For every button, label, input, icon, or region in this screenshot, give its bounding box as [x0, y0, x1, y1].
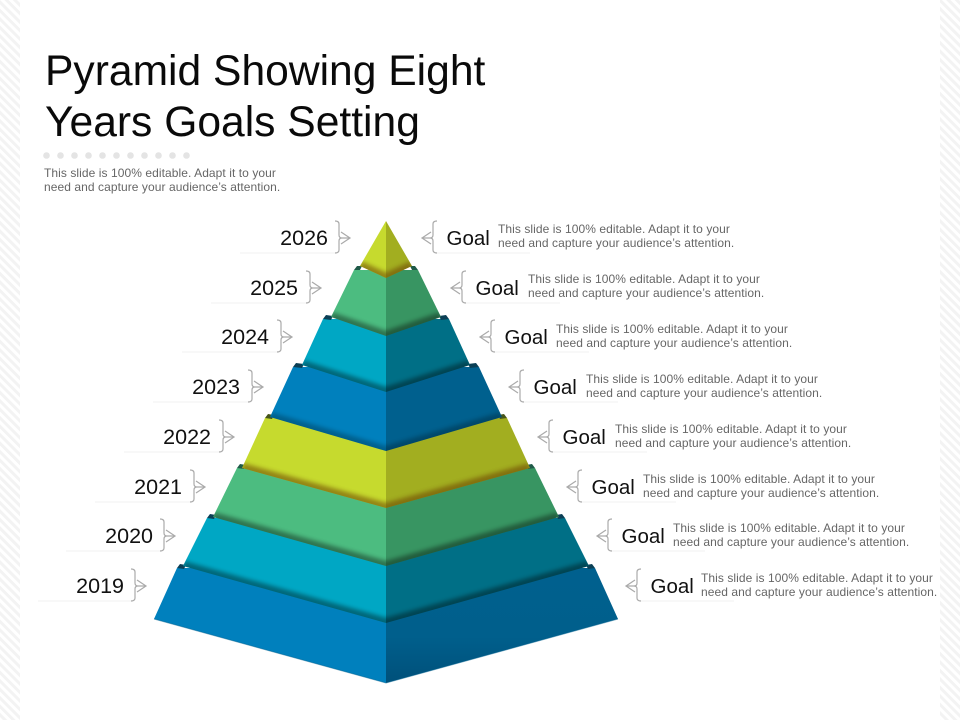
- goal 2021: This slide is 100% editable. Adapt it to your: [643, 472, 875, 486]
- goal 2025: This slide is 100% editable. Adapt it to your: [528, 272, 760, 286]
- dotted separator: [43, 152, 190, 159]
- goal 2022: This slide is 100% editable. Adapt it to your: [615, 422, 847, 436]
- label: 2026: [240, 221, 350, 253]
- left striped border: [0, 0, 20, 720]
- label: 2024: 2024: [221, 325, 269, 349]
- subtitle text: This slide is 100% editable. Adapt it to your: [44, 166, 276, 180]
- title: Years Goals Setting: [45, 98, 420, 146]
- goal 2020: Goal: [622, 525, 665, 548]
- tier 2023: [265, 367, 507, 451]
- right striped border: [940, 0, 960, 720]
- label: 2026: 2026: [280, 226, 328, 250]
- goal 2026: need and capture your audience’s attention.: [498, 236, 734, 250]
- goal 2025: need and capture your audience’s attention.: [528, 286, 764, 300]
- goal 2020: need and capture your audience’s attention.: [673, 535, 909, 549]
- goal 2023: This slide is 100% editable. Adapt it to your: [586, 372, 818, 386]
- goal 2019: This slide is 100% editable. Adapt it to your: [701, 571, 933, 585]
- label: 2022: 2022: [163, 425, 211, 449]
- tier 2020: [177, 518, 595, 623]
- label: 2025: 2025: [250, 276, 298, 300]
- goal 2022: Goal: [562, 426, 606, 449]
- goal 2024: need and capture your audience’s attention.: [556, 336, 792, 350]
- label: 2025: [211, 271, 321, 303]
- title: [45, 47, 486, 146]
- goal 2022: need and capture your audience’s attention.: [615, 436, 851, 450]
- goal 2021: [567, 470, 879, 502]
- tier 2019: [154, 568, 618, 683]
- goal 2019: [626, 569, 937, 601]
- subtitle text: [44, 166, 280, 194]
- label: 2024: [182, 320, 292, 352]
- label: 2020: [66, 519, 175, 551]
- goal 2025: Goal: [476, 277, 519, 300]
- tier 2025: [323, 270, 449, 336]
- goal 2024: [480, 320, 792, 352]
- title: Pyramid Showing Eight: [45, 47, 486, 95]
- label: 2021: 2021: [134, 475, 182, 499]
- goal 2026: [422, 221, 734, 253]
- label: 2020: 2020: [105, 524, 153, 548]
- label: 2019: 2019: [76, 574, 124, 598]
- goal 2023: Goal: [534, 376, 577, 399]
- label: 2022: [124, 420, 234, 452]
- goal 2024: This slide is 100% editable. Adapt it to your: [556, 322, 788, 336]
- label: 2021: [95, 470, 205, 502]
- goal 2020: [597, 519, 909, 551]
- goal 2019: need and capture your audience’s attention.: [701, 585, 937, 599]
- goal 2024: Goal: [504, 326, 548, 349]
- label: 2023: [153, 370, 263, 402]
- goal 2026: This slide is 100% editable. Adapt it to your: [498, 222, 730, 236]
- subtitle text: need and capture your audience’s attention.: [44, 180, 280, 194]
- goal 2025: [451, 271, 764, 303]
- goal 2026: Goal: [446, 227, 490, 250]
- goal 2021: Goal: [592, 476, 635, 499]
- goal 2019: Goal: [650, 575, 694, 598]
- goal 2023: need and capture your audience’s attention.: [586, 386, 822, 400]
- tier 2022: [237, 418, 535, 508]
- goal 2022: [538, 420, 851, 452]
- pyramid: [154, 221, 618, 683]
- label: 2019: [38, 569, 146, 601]
- tier 2021: [207, 468, 565, 566]
- tier 2024: [293, 319, 479, 392]
- goal 2023: [509, 370, 822, 402]
- tier 2026: [354, 221, 418, 278]
- goal 2021: need and capture your audience’s attention.: [643, 486, 879, 500]
- goal 2020: This slide is 100% editable. Adapt it to your: [673, 521, 905, 535]
- label: 2023: 2023: [192, 375, 240, 399]
